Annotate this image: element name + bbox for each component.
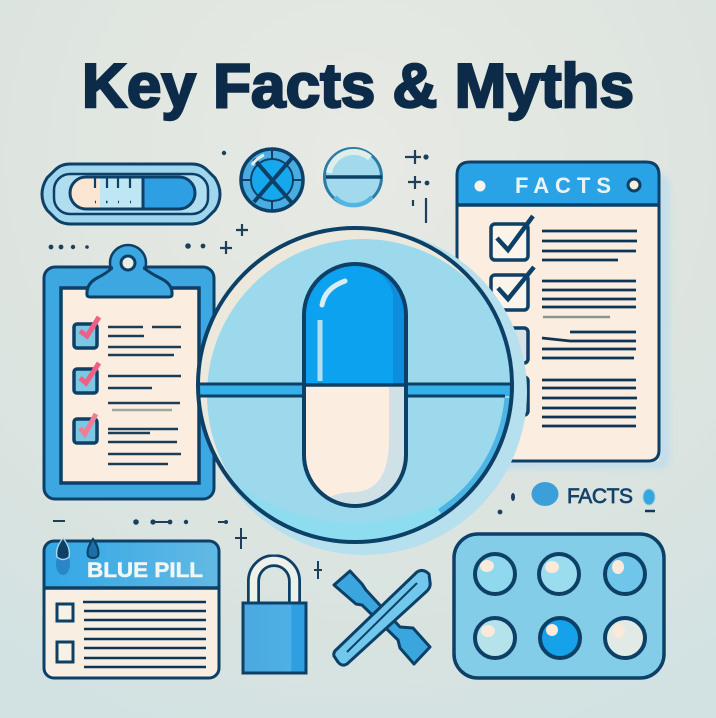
facts label with dots bbox=[532, 482, 655, 511]
title: Key Facts & Myths bbox=[82, 52, 634, 121]
blister pills bbox=[475, 554, 645, 658]
clip bbox=[87, 245, 172, 297]
tablet disc bbox=[198, 228, 512, 542]
lines bbox=[83, 602, 206, 667]
panel: blister pack bbox=[454, 534, 664, 678]
checkboxes bbox=[57, 604, 73, 662]
checkboxes bbox=[491, 216, 534, 415]
icon: crossed-out circle bbox=[241, 149, 303, 211]
icon: scored tablet bbox=[324, 148, 382, 206]
text lines bbox=[542, 231, 637, 426]
icon: padlock bbox=[243, 560, 306, 673]
panel: clipboard checklist bbox=[44, 245, 214, 499]
circle shadow bbox=[201, 229, 527, 555]
panel: blue pill card bbox=[44, 538, 219, 678]
icon: crossed bars bbox=[334, 570, 430, 665]
header dots bbox=[474, 179, 640, 192]
main capsule tablet bbox=[198, 228, 527, 560]
facts heading: FACTS bbox=[515, 173, 611, 198]
panel: facts sheet bbox=[457, 162, 670, 469]
pill highlights bbox=[480, 560, 625, 638]
binder rings bbox=[56, 538, 98, 575]
facts label with dots: FACTS bbox=[567, 485, 633, 508]
blue pill label: BLUE PILL bbox=[87, 559, 203, 582]
decorative sparkles middle bbox=[53, 493, 515, 579]
checklist rows bbox=[74, 317, 181, 464]
capsule bbox=[304, 264, 406, 506]
decorative sparkles top bbox=[49, 150, 429, 254]
icon: test strip capsule bbox=[42, 164, 220, 224]
